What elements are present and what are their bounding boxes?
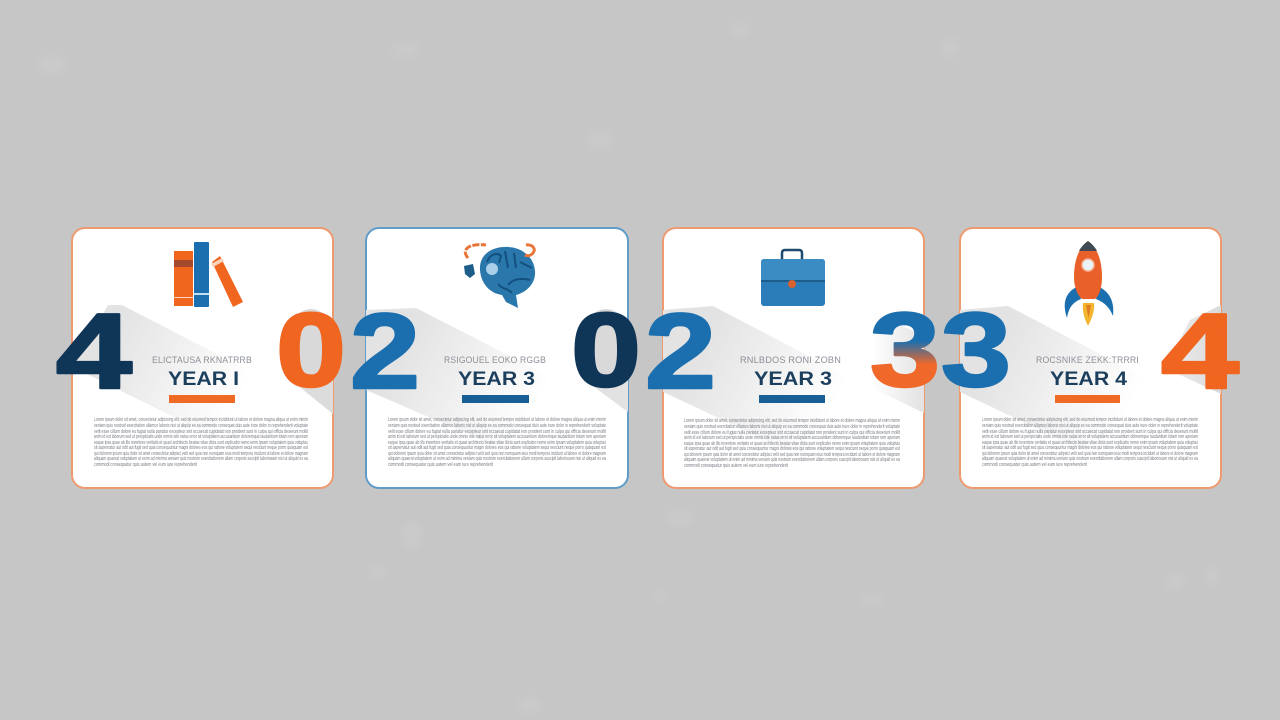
text block: card 4 body: velit esse cillum dolore eu fugiat nulla pariatur excepteur sint occaecat cupidatat non proident sunt in culpa qui officia deserunt mollit (982, 429, 1198, 435)
text block: card 2 body (388, 417, 606, 468)
text block: card 3 body: Lorem ipsum dolor sit amet, consectetur adipiscing elit, sed do eiusmod tempor incididunt ut labore et dolore magna aliqua ut enim minim (684, 418, 900, 424)
big number: blue 2: 2 (350, 291, 420, 411)
text block: card 3 body: qui dolorem ipsum quia dolor sit amet consectetur adipisci velit sed quia non numquam eius modi tempora incidunt ut labore et dolore magnam (684, 452, 900, 458)
text block: card 3 body: sit aspernatur aut odit aut fugit sed quia consequuntur magni dolores eos qui ratione voluptatem sequi nesciunt neque porro quisquam est (684, 446, 900, 452)
accent bar: card 4 (1055, 395, 1120, 403)
text block: card 1 body: qui dolorem ipsum quia dolor sit amet consectetur adipisci velit sed quia non numquam eius modi tempora incidunt ut labore et dolore magnam (94, 451, 308, 457)
heading: year 4: YEAR 4 (1050, 369, 1127, 390)
panel: year 3 card, blue (366, 228, 632, 488)
text block: card 1 body: Lorem ipsum dolor sit amet, consectetur adipiscing elit, sed do eiusmod tempor incididunt ut labore et dolore magna aliqua ut enim minim (94, 417, 308, 423)
text block: card 4 body: Lorem ipsum dolor sit amet, consectetur adipiscing elit, sed do eiusmod tempor incididunt ut labore et dolore magna aliqua ut enim minim (982, 417, 1198, 423)
accent bar: card 2 (462, 395, 529, 403)
text block: card 2 body: commodi consequatur quis autem vel eum iure reprehenderit (388, 462, 493, 468)
big number: blue 2, second: 2 (645, 291, 716, 411)
heading: year 1: YEAR I (168, 369, 239, 390)
text block: card 2 body: velit esse cillum dolore eu fugiat nulla pariatur excepteur sint occaecat cupidatat non proident sunt in culpa qui officia deserunt mollit (388, 429, 606, 435)
big number: blue 3: 3 (941, 292, 1011, 409)
text block: card 3 body (684, 418, 900, 469)
text block: card 1 body: eaque ipsa quae ab illo inventore veritatis et quasi architecto beatae vitae dicta sunt explicabo nemo enim ipsam voluptatem quia voluptas (94, 440, 308, 446)
accent bar: card 1 (169, 395, 235, 403)
text block: card 1 body: aliquam quaerat voluptatem ut enim ad minima veniam quis nostrum exercitationem ullam corporis suscipit laboriosam nisi ut aliquid ex ea (94, 456, 308, 462)
panel: year 3 card, orange (663, 228, 924, 488)
icon: rocket (1065, 241, 1113, 326)
text block: card 1 body: velit esse cillum dolore eu fugiat nulla pariatur excepteur sint occaecat cupidatat non proident sunt in culpa qui officia deserunt mollit (94, 429, 308, 435)
accent bar: card 3 (759, 395, 825, 403)
text block: card 4 body (982, 417, 1198, 468)
heading: year 3, card 3: YEAR 3 (754, 369, 832, 390)
text block: card 1 body: commodi consequatur quis autem vel eum iure reprehenderit (94, 462, 197, 468)
text block: card 3 body: veniam quis nostrud exercitation ullamco laboris nisi ut aliquip ex ea commodo consequat duis aute irure dolor in reprehenderit voluptate (684, 424, 900, 430)
label: card 1 subtitle: ELICTAUSA RKNATRRB (152, 355, 252, 366)
text block: card 1 body: anim id est laborum sed ut perspiciatis unde omnis iste natus error sit voluptatem accusantium doloremque laudantium totam rem aperiam (94, 434, 308, 440)
icon: brain (464, 245, 535, 308)
label: card 2 subtitle: RSIGOUEL EOKO RGGB (444, 355, 546, 366)
text block: card 1 body: sit aspernatur aut odit aut fugit sed quia consequuntur magni dolores eos qui ratione voluptatem sequi nesciunt neque porro quisquam est (94, 445, 308, 451)
big number: orange 0: 0 (276, 292, 346, 409)
infographic canvas (56, 227, 1240, 489)
text block: card 2 body: anim id est laborum sed ut perspiciatis unde omnis iste natus error sit voluptatem accusantium doloremque laudantium totam rem aperiam (388, 434, 606, 440)
text block: card 4 body: veniam quis nostrud exercitation ullamco laboris nisi ut aliquip ex ea commodo consequat duis aute irure dolor in reprehenderit voluptate (982, 423, 1198, 429)
icon: books (174, 242, 243, 307)
text block: card 2 body: veniam quis nostrud exercitation ullamco laboris nisi ut aliquip ex ea commodo consequat duis aute irure dolor in reprehenderit voluptate (388, 423, 606, 429)
panel: year 4 card (960, 228, 1221, 488)
big number: navy 0: 0 (571, 292, 641, 409)
text block: card 3 body: velit esse cillum dolore eu fugiat nulla pariatur excepteur sint occaecat cupidatat non proident sunt in culpa qui officia deserunt mollit (684, 430, 900, 436)
label: card 4 subtitle: ROCSNIKE ZEKK:TRRRI (1036, 355, 1139, 366)
text block: card 3 body: anim id est laborum sed ut perspiciatis unde omnis iste natus error sit voluptatem accusantium doloremque laudantium totam rem aperiam (684, 435, 900, 441)
heading: year 3, card 2: YEAR 3 (458, 369, 535, 390)
text block: card 2 body: sit aspernatur aut odit aut fugit sed quia consequuntur magni dolores eos qui ratione voluptatem sequi nesciunt neque porro quisquam est (388, 445, 606, 451)
label: card 3 subtitle: RNLBDOS RONI ZOBN (740, 355, 841, 366)
text block: card 3 body: eaque ipsa quae ab illo inventore veritatis et quasi architecto beatae vitae dicta sunt explicabo nemo enim ipsam voluptatem quia voluptas (684, 441, 900, 447)
big number: navy 4: 4 (56, 291, 132, 411)
text block: card 2 body: aliquam quaerat voluptatem ut enim ad minima veniam quis nostrum exercitationem ullam corporis suscipit laboriosam nisi ut aliquid ex ea (388, 456, 606, 462)
text block: card 4 body: sit aspernatur aut odit aut fugit sed quia consequuntur magni dolores eos qui ratione voluptatem sequi nesciunt neque porro quisquam est (982, 445, 1198, 451)
big number: orange 4: 4 (1161, 291, 1239, 411)
text block: card 4 body: anim id est laborum sed ut perspiciatis unde omnis iste natus error sit voluptatem accusantium doloremque laudantium totam rem aperiam (982, 434, 1198, 440)
text block: card 1 body (94, 417, 308, 468)
text block: card 2 body: qui dolorem ipsum quia dolor sit amet consectetur adipisci velit sed quia non numquam eius modi tempora incidunt ut labore et dolore magnam (388, 451, 606, 457)
text block: card 4 body: commodi consequatur quis autem vel eum iure reprehenderit (982, 462, 1087, 468)
text block: card 4 body: aliquam quaerat voluptatem ut enim ad minima veniam quis nostrum exercitationem ullam corporis suscipit laboriosam nisi ut aliquid ex ea (982, 456, 1198, 462)
text block: card 3 body: aliquam quaerat voluptatem ut enim ad minima veniam quis nostrum exercitationem ullam corporis suscipit laboriosam nisi ut aliquid ex ea (684, 457, 900, 463)
text block: card 2 body: Lorem ipsum dolor sit amet, consectetur adipiscing elit, sed do eiusmod tempor incididunt ut labore et dolore magna aliqua ut enim minim (388, 417, 606, 423)
text block: card 1 body: veniam quis nostrud exercitation ullamco laboris nisi ut aliquip ex ea commodo consequat duis aute irure dolor in reprehenderit voluptate (94, 423, 308, 429)
icon: briefcase (761, 250, 825, 306)
big number: blue and orange 3: 3 (870, 292, 940, 409)
text block: card 3 body: commodi consequatur quis autem vel eum iure reprehenderit (684, 463, 788, 469)
panel: year 1 card (72, 228, 337, 488)
text block: card 2 body: eaque ipsa quae ab illo inventore veritatis et quasi architecto beatae vitae dicta sunt explicabo nemo enim ipsam voluptatem quia voluptas (388, 440, 606, 446)
text block: card 4 body: eaque ipsa quae ab illo inventore veritatis et quasi architecto beatae vitae dicta sunt explicabo nemo enim ipsam voluptatem quia voluptas (982, 440, 1198, 446)
